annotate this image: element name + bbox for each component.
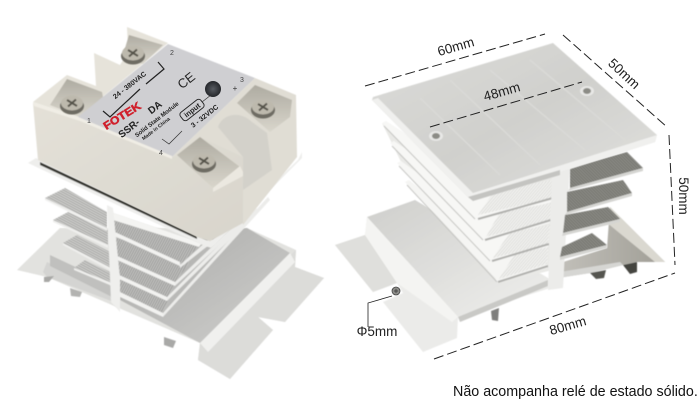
origin: Made in China [141,116,172,142]
module description: Solid State Module [134,101,181,139]
mounting hole, left [429,131,443,141]
fins, left of stem [382,121,560,284]
AC voltage rating: 24 - 380VAC [112,71,148,101]
heat sink top plate under the relay [28,152,302,248]
status LED [205,81,221,97]
terminal number 1: 1 [87,118,91,125]
dimension line: 48mm [430,82,582,127]
circular notch in right body [218,115,272,190]
grey label plate [78,44,255,157]
dimension lines [365,34,675,359]
front face [33,103,243,241]
terminal number 4: 4 [159,150,163,157]
back terminal pillars [33,27,168,117]
dimension line: 50mm height [669,135,675,265]
base plate [335,200,665,352]
photo: bare heat sink [335,43,665,352]
terminal number 2: 2 [170,50,174,57]
top plate [372,43,657,201]
relay housing [33,27,297,241]
dimension line: 80mm [434,273,675,359]
screw terminal, front [192,154,216,172]
relay label printing [87,50,244,157]
model DA: DA [146,99,165,117]
plus sign: + [233,84,238,93]
right body [172,78,297,225]
input tag [179,98,205,122]
heat sink fins, left of stem [45,188,112,286]
front terminal pocket [177,137,240,188]
heat sink fins, right of stem [107,197,270,317]
label: hole diameter: Φ5mm [357,324,397,339]
mounting hole, right [580,86,594,96]
footer note: Não acompanha relé de estado sólido. [453,384,698,400]
label: 60mm: 60mm [436,34,476,59]
screw terminal, back left [60,96,84,114]
label: 50mm depth: 50mm [605,55,643,92]
photo: solid state relay mounted on heat sink [17,27,324,379]
label: 50mm height: 50mm [676,177,691,215]
input trace [162,95,211,144]
label: 80mm: 80mm [548,313,588,338]
heat sink base plate [17,228,324,379]
AC circuit trace [103,62,164,117]
slot screw [392,287,400,295]
screw terminal, right [251,100,275,118]
DC voltage rating: 3 - 32VDC [190,104,220,130]
terminal number 3: 3 [240,77,244,84]
label: 48mm: 48mm [482,79,522,104]
model SSR: SSR- [117,117,142,141]
brand logo: FOTEK [101,100,143,133]
fins, right of stem [548,152,643,290]
CE mark: CE [174,69,198,92]
dimension line: 50mm depth [563,35,667,127]
hole leader line [368,296,392,327]
screw terminal, back right [121,46,145,64]
dimension line: 60mm [365,34,545,86]
input tag: input [182,101,203,119]
